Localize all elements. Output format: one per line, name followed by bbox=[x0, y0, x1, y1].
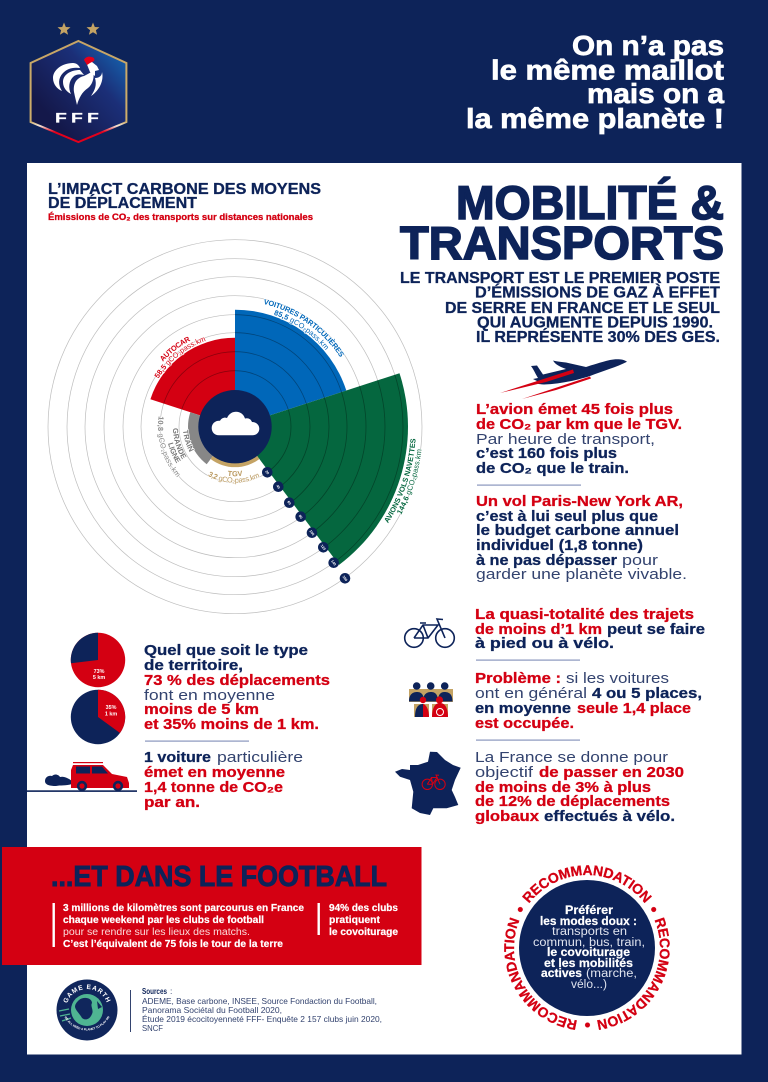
chart: pie 35% under 1 km bbox=[71, 690, 125, 744]
text block: car occupancy bbox=[475, 670, 702, 732]
text block: short distances: moins de 5 km bbox=[144, 701, 259, 718]
chart: radial carbon emissions by transport mode bbox=[48, 239, 422, 614]
text block: sources: Sources bbox=[142, 986, 167, 996]
ring text: recommandation: RECOMMANDATION bbox=[504, 917, 577, 1030]
logo: FFF crest bbox=[31, 22, 126, 142]
text block: short distances: de territoire, bbox=[144, 657, 243, 674]
heading: Mobilité & Transports: TRANSPORTS bbox=[400, 217, 724, 269]
text block: Paris-New York flight bbox=[476, 493, 687, 583]
text block: 2030 cycling goal: de passer en 2030 bbox=[539, 764, 684, 781]
text block: short trips: peut se faire bbox=[607, 621, 705, 638]
text block: intro: QUI AUGMENTE DEPUIS 1990. bbox=[477, 314, 713, 332]
text block: car occupancy: 4 ou 5 places, bbox=[592, 685, 702, 702]
title: slogan: le même maillot bbox=[491, 54, 724, 86]
label: train grande ligne bbox=[157, 416, 195, 477]
text block: plane vs TGV: L’avion émet 45 fois plus bbox=[476, 401, 673, 418]
text block: short distances: et 35% moins de 1 km. bbox=[144, 716, 319, 733]
text block: short trips: La quasi-totalité des trajets bbox=[475, 606, 694, 623]
scale: ring value markers: 140 bbox=[330, 559, 337, 566]
label: voitures particulières: VOITURES PARTICULIÈRES bbox=[264, 298, 344, 357]
panel: main white content bbox=[27, 163, 742, 1054]
text block: carpooling clubs: le covoiturage bbox=[329, 927, 399, 938]
text block: intro bbox=[400, 270, 721, 346]
hub: cloud icon bbox=[198, 390, 272, 463]
text block: 2030 cycling goal: de 12% de déplacements bbox=[475, 793, 670, 810]
text: recommendation body: Préférer bbox=[565, 905, 614, 917]
label: train grande ligne: 10,8 gCO₂pass.km bbox=[157, 416, 180, 477]
text block: short distances: Quel que soit le type bbox=[144, 642, 308, 659]
text block: sources: : bbox=[170, 986, 172, 996]
text block: carpooling clubs: pratiquent bbox=[329, 915, 381, 926]
text block: 2030 cycling goal: globaux bbox=[475, 808, 540, 825]
text block: Paris-New York flight: à ne pas dépasser bbox=[476, 552, 617, 569]
text block: 2030 cycling goal: La France se donne pour bbox=[475, 749, 668, 766]
text block: short trips bbox=[475, 606, 705, 652]
scale: ring value markers: 160 bbox=[341, 575, 348, 582]
text block: kilometres travelled bbox=[52, 903, 305, 950]
title: slogan: la même planète ! bbox=[466, 103, 724, 134]
text block: car occupancy: est occupée. bbox=[475, 715, 574, 732]
text block: kilometres travelled: C’est l’équivalent de 75 fois le tour de la terre bbox=[63, 939, 284, 950]
text block: carpooling clubs: 94% des clubs bbox=[329, 903, 399, 914]
text block: short distances bbox=[144, 642, 330, 733]
text block: car occupancy: ont en général bbox=[475, 685, 587, 702]
text block: car emissions: par an. bbox=[144, 794, 200, 811]
text: recommendation body: transports en bbox=[552, 926, 627, 938]
text block: Paris-New York flight: Un vol Paris-New York AR, bbox=[476, 493, 683, 510]
title: slogan: mais on a bbox=[587, 78, 724, 109]
scale: ring value markers bbox=[262, 467, 350, 584]
text: recommendation body: le covoiturage bbox=[547, 947, 630, 959]
text block: plane vs TGV: c’est 160 fois plus bbox=[476, 445, 617, 462]
title: slogan bbox=[466, 30, 724, 134]
label: train grande ligne: TRAIN bbox=[183, 429, 195, 452]
text block: car emissions bbox=[144, 749, 303, 811]
text block: kilometres travelled: chaque weekend par les clubs de football bbox=[63, 915, 264, 926]
text: recommendation body: (marche, bbox=[586, 968, 637, 980]
label: TGV: TGV bbox=[228, 470, 242, 476]
text block: sources: ADEME, Base carbone, INSEE, Source Fondaction du Football, bbox=[142, 996, 377, 1006]
scale: ring value markers: 20 bbox=[264, 470, 270, 475]
text block: Paris-New York flight: le budget carbone annuel bbox=[476, 522, 679, 539]
chart: pie 35% under 1 km: 1 km bbox=[105, 712, 117, 718]
label: autocar: AUTOCAR bbox=[160, 336, 190, 362]
callout: recommendation bbox=[504, 865, 670, 1030]
icon: car with exhaust bbox=[27, 762, 137, 792]
title: slogan: On n’a pas bbox=[572, 30, 724, 61]
text: recommendation body: les modes doux : bbox=[540, 916, 637, 928]
scale: ring value markers: 60 bbox=[286, 500, 292, 506]
text block: plane vs TGV: Par heure de transport, bbox=[476, 431, 655, 448]
label: voitures particulières: 85,5 gCO₂pass.km bbox=[274, 310, 328, 350]
chart: pie 73% under 5 km bbox=[71, 633, 125, 687]
sector: voitures particulières bbox=[235, 310, 346, 427]
icon: bicycle bbox=[405, 619, 454, 647]
text block: sources bbox=[142, 986, 382, 1033]
text block: carpooling clubs bbox=[318, 903, 399, 938]
text block: car occupancy: Problème : bbox=[475, 670, 561, 687]
text block: intro: D’ÉMISSIONS DE GAZ À EFFET bbox=[475, 284, 721, 302]
icon: plane bbox=[500, 359, 627, 399]
chart: pie 73% under 5 km: 73% bbox=[94, 669, 105, 675]
label: TGV: 3,2 gCO₂pass.km bbox=[208, 472, 260, 484]
panel: football bbox=[2, 847, 422, 965]
text: recommendation body: actives bbox=[541, 968, 582, 980]
logo: Game Earth: GAME EARTH bbox=[64, 984, 111, 1002]
text block: sources: Étude 2019 écocitoyenneté FFF- Enquête 2 157 clubs juin 2020, bbox=[142, 1014, 382, 1024]
label: avions vols navettes: AVIONS VOLS NAVETTES bbox=[384, 438, 416, 524]
text block: car occupancy: seule 1,4 place bbox=[577, 700, 691, 717]
text block: car occupancy: si les voitures bbox=[566, 670, 669, 687]
chart: pie 73% under 5 km: 5 km bbox=[93, 675, 105, 681]
heading: carbon impact of transport: DE DÉPLACEMENT bbox=[48, 195, 198, 212]
text block: short trips: à pied ou à vélo. bbox=[475, 635, 614, 652]
sector: autocar bbox=[150, 338, 235, 427]
text block: 2030 cycling goal bbox=[475, 749, 684, 825]
text block: intro: DE SERRE EN FRANCE ET LE SEUL bbox=[445, 300, 720, 317]
ring text: recommandation bbox=[504, 865, 670, 1030]
text block: intro: IL REPRÉSENTE 30% DES GES. bbox=[476, 329, 720, 346]
text block: short trips: de moins d’1 km bbox=[475, 621, 602, 638]
text block: short distances: 73 % des déplacements bbox=[144, 672, 330, 689]
text: recommendation body: et les mobilités bbox=[544, 958, 633, 970]
text block: kilometres travelled: 3 millions de kilomètres sont parcourus en France bbox=[63, 903, 305, 914]
text: recommendation body: commun, bus, train, bbox=[533, 937, 645, 949]
scale: ring value markers: 120 bbox=[320, 544, 326, 551]
text block: Paris-New York flight: pour bbox=[622, 552, 658, 569]
text block: kilometres travelled: pour se rendre sur les lieux des matchs. bbox=[63, 927, 250, 938]
text block: Paris-New York flight: individuel (1,8 tonne) bbox=[476, 537, 643, 554]
text block: intro: LE TRANSPORT EST LE PREMIER POSTE bbox=[400, 270, 720, 287]
logo: FFF crest: FFF bbox=[55, 109, 103, 125]
text block: car emissions: 1,4 tonne de CO₂e bbox=[144, 779, 283, 796]
logo: Game Earth: WE ALL NEED A PLANET TO PLAY ON bbox=[64, 1016, 110, 1030]
sector: avions vols navettes bbox=[235, 373, 408, 565]
text block: plane vs TGV: de CO₂ par km que le TGV. bbox=[476, 416, 682, 433]
heading: carbon impact of transport: Émissions de CO₂ des transports sur distances nationales bbox=[48, 212, 313, 223]
text block: car occupancy: en moyenne bbox=[475, 700, 571, 717]
text block: Paris-New York flight: c’est à lui seul plus que bbox=[476, 508, 658, 525]
text block: plane vs TGV: de CO₂ que le train. bbox=[476, 460, 629, 477]
logo: Game Earth bbox=[56, 980, 118, 1040]
heading: et dans le football: ...ET DANS LE FOOTBALL bbox=[51, 861, 387, 893]
chart: pie 35% under 1 km: 35% bbox=[106, 705, 117, 711]
text: recommendation body bbox=[533, 905, 645, 991]
label: train grande ligne: LIGNE bbox=[168, 442, 181, 464]
ring text: recommandation: RECOMMANDATION bbox=[522, 865, 652, 904]
heading: Mobilité & Transports bbox=[400, 176, 724, 269]
label: avions vols navettes: 144,6 gCO₂pass.km bbox=[397, 449, 422, 515]
text block: sources: Panorama Sociétal du Football 2020, bbox=[142, 1005, 282, 1015]
text block: sources: SNCF bbox=[142, 1023, 163, 1033]
text block: 2030 cycling goal: effectués à vélo. bbox=[544, 808, 675, 825]
text block: car emissions: 1 voiture bbox=[144, 749, 211, 766]
scale: ring value markers: 40 bbox=[275, 484, 281, 490]
text block: 2030 cycling goal: de moins de 3% à plus bbox=[475, 779, 651, 796]
heading: carbon impact of transport bbox=[48, 181, 321, 223]
sector: train grande ligne bbox=[188, 412, 235, 464]
scale: ring value markers: 100 bbox=[308, 529, 315, 536]
icon: France map with bicycle bbox=[395, 752, 461, 815]
text block: car emissions: particulière bbox=[217, 749, 303, 766]
text block: car emissions: émet en moyenne bbox=[144, 764, 285, 781]
text: recommendation body: vélo...) bbox=[571, 979, 607, 991]
icon: car occupants bbox=[409, 682, 453, 717]
text block: 2030 cycling goal: objectif bbox=[475, 764, 534, 781]
heading: carbon impact of transport: L’IMPACT CARBONE DES MOYENS bbox=[48, 181, 321, 198]
text block: short distances: font en moyenne bbox=[144, 687, 275, 704]
sector: TGV bbox=[211, 427, 259, 467]
text block: plane vs TGV bbox=[476, 401, 682, 477]
scale: ring value markers: 80 bbox=[298, 514, 303, 520]
label: autocar: 58,5 gCO₂pass.km bbox=[154, 338, 206, 378]
text block: Paris-New York flight: garder une planète vivable. bbox=[476, 566, 687, 583]
heading: Mobilité & Transports: MOBILITÉ & bbox=[456, 176, 724, 229]
ring text: recommandation: RECOMMANDATION bbox=[597, 917, 670, 1030]
label: train grande ligne: GRANDE bbox=[173, 428, 188, 460]
